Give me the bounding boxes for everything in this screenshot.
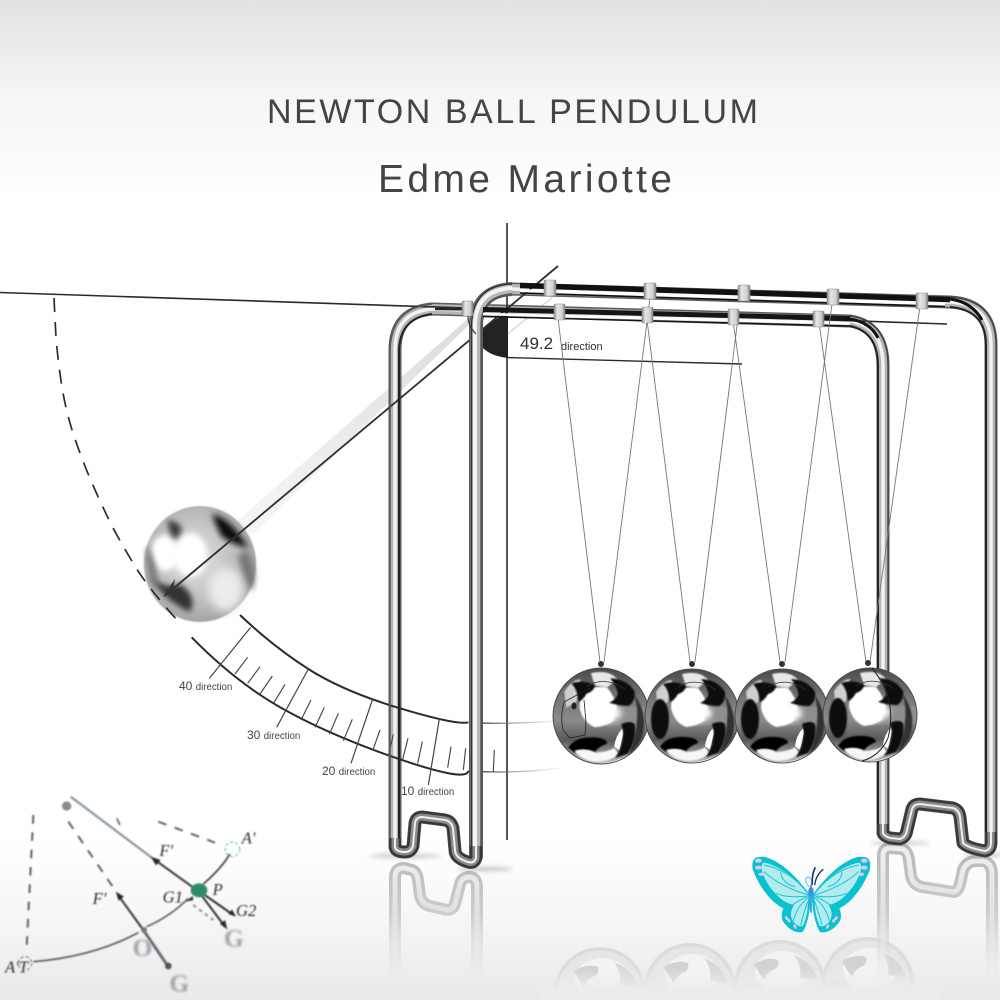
pendulum strings bbox=[558, 298, 920, 662]
scale arc fading tails bbox=[468, 721, 560, 772]
A' link bbox=[203, 854, 230, 884]
pale string trace bbox=[488, 297, 553, 350]
steel ball 1 bbox=[553, 661, 650, 764]
angle wedge bbox=[482, 310, 508, 358]
floor reflections of the frame and balls bbox=[395, 848, 992, 1000]
body and antennae bbox=[806, 867, 823, 913]
motion-blurred ball bbox=[144, 506, 256, 622]
scale upper arc bbox=[240, 615, 468, 723]
angle label: 49.2 bbox=[520, 334, 553, 353]
dashed swing arc bbox=[54, 298, 177, 620]
butterfly bbox=[752, 857, 870, 932]
labels bbox=[4, 828, 256, 977]
inner left leg bbox=[390, 304, 432, 845]
green bob bbox=[191, 883, 207, 897]
labels: G2 bbox=[236, 901, 256, 920]
labels: A' bbox=[241, 828, 256, 847]
scale lower arc bbox=[192, 637, 468, 775]
pivot dot bbox=[62, 801, 71, 811]
rail clamps bbox=[462, 280, 928, 327]
right legs bbox=[850, 297, 996, 842]
reflection: left foot bbox=[395, 868, 477, 1000]
right feet bbox=[883, 804, 991, 851]
title: NEWTON BALL PENDULUM bbox=[267, 93, 758, 131]
pale motion band bbox=[237, 317, 474, 535]
short ticks bbox=[235, 657, 494, 772]
inner chrome frame (back) bbox=[395, 289, 991, 862]
swing arrow bbox=[163, 266, 558, 597]
scale labels bbox=[179, 679, 454, 798]
angle baseline bbox=[507, 358, 742, 364]
reflection: balls bbox=[540, 937, 940, 1000]
upper rail bbox=[520, 286, 982, 320]
force arrows bbox=[186, 892, 236, 929]
labels: A'T bbox=[4, 958, 30, 977]
vertical reference line bbox=[506, 223, 508, 840]
left wings bbox=[752, 857, 811, 932]
chrome frame details bbox=[390, 284, 996, 862]
labels: G1 bbox=[163, 888, 183, 907]
label 30: 30 direction bbox=[247, 728, 300, 742]
steel ball 2 bbox=[644, 661, 740, 764]
second pendulum arrow bbox=[116, 892, 172, 969]
angle scale with ticks bbox=[192, 615, 494, 785]
horizontal reference line bbox=[0, 292, 947, 324]
tension arrow bbox=[151, 857, 197, 890]
angle label: direction bbox=[561, 341, 603, 353]
label 20: 20 direction bbox=[322, 764, 375, 778]
label 10: 10 direction bbox=[401, 784, 454, 798]
lower rail bbox=[435, 309, 878, 338]
grey labels bbox=[133, 925, 244, 998]
foot contact shadows bbox=[369, 842, 1000, 870]
labels: F' bbox=[158, 841, 174, 860]
grey labels: O bbox=[133, 934, 152, 962]
long ticks bbox=[209, 627, 439, 785]
right wings bbox=[812, 857, 870, 932]
force diagram bbox=[4, 797, 256, 998]
pendulum string bbox=[71, 797, 153, 858]
label 40: 40 direction bbox=[179, 679, 232, 693]
dashed circles bbox=[18, 842, 240, 970]
arc path bbox=[33, 898, 188, 962]
small tick bbox=[117, 818, 120, 825]
grey labels: G bbox=[169, 970, 189, 998]
subtitle: Edme Mariotte bbox=[378, 158, 672, 201]
labels: F' bbox=[92, 889, 107, 908]
labels: P bbox=[212, 880, 223, 899]
steel ball 3 bbox=[734, 661, 830, 764]
small loop by clamp bbox=[468, 316, 476, 334]
sharp-ish strokes bbox=[4, 797, 256, 977]
steel ball 4 bbox=[822, 660, 918, 762]
dashed guides bbox=[27, 815, 215, 947]
outer left leg bbox=[472, 284, 512, 858]
left feet bbox=[395, 817, 476, 862]
grey labels: G bbox=[224, 925, 244, 953]
reflection: right foot bbox=[883, 848, 992, 985]
